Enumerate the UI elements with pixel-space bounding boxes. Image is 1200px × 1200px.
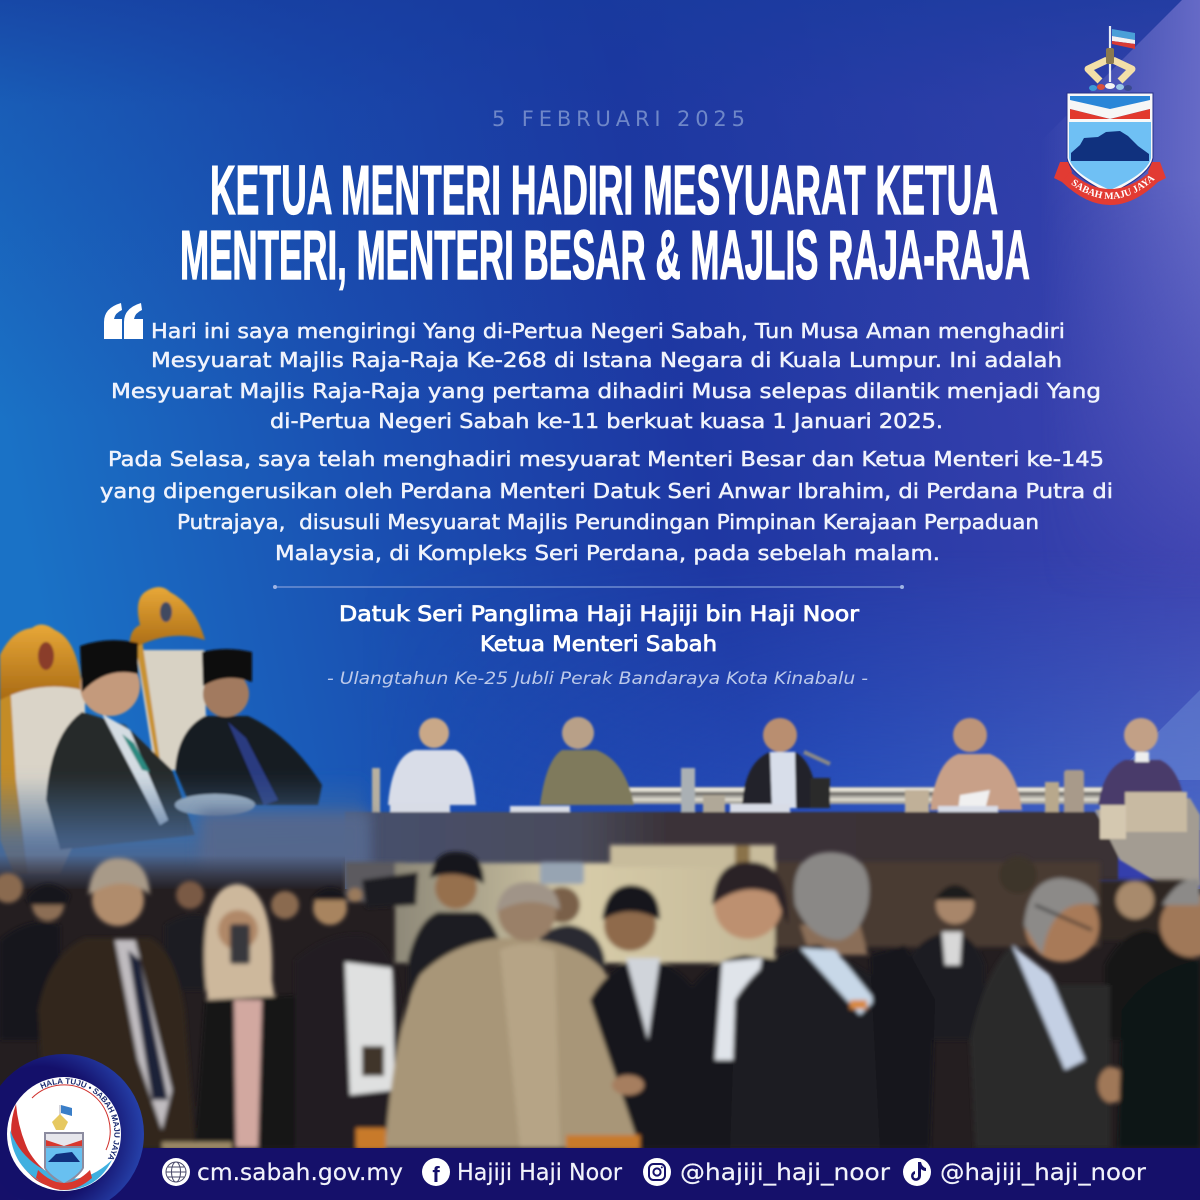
blue fade over lower seated figures xyxy=(0,775,370,890)
photo: head table meeting xyxy=(345,717,1200,890)
clear glass display at right xyxy=(1095,798,1200,890)
icon: instagram xyxy=(643,1158,671,1186)
right background people xyxy=(905,856,1200,1040)
crowd backdrop xyxy=(0,855,345,890)
facebook name: Hajiji Haji Noor xyxy=(457,1160,623,1186)
hijab woman xyxy=(195,884,310,1148)
rear man xyxy=(175,649,322,805)
tiktok handle: @hajiji_haji_noor xyxy=(940,1160,1147,1186)
quote paragraph 1: Mesyuarat Majlis Raja-Raja yang pertama dihadiri Musa selepas dilantik menjadi Yang xyxy=(111,379,1101,403)
quote paragraph 1: Hari ini saya mengiringi Yang di-Pertua Negeri Sabah, Tun Musa Aman menghadiri xyxy=(151,319,1065,343)
name plates xyxy=(390,803,998,818)
icon: facebook: f xyxy=(432,1162,440,1187)
photo: Yang di-Pertua and Chief Minister seated on throne chairs xyxy=(0,587,370,890)
quote paragraph 2: yang dipengerusikan oleh Perdana Menteri Datuk Seri Anwar Ibrahim, di Perdana Putra di xyxy=(100,479,1113,503)
title xyxy=(180,151,1030,294)
photo: crowd standing around table xyxy=(0,845,1200,1151)
phone and background man xyxy=(528,862,605,985)
icon: tiktok xyxy=(903,1158,931,1186)
bottles on table xyxy=(372,768,1084,818)
man with lanyard xyxy=(295,934,410,1148)
grey-haired man from back xyxy=(730,852,935,1148)
background xyxy=(0,0,1200,889)
front man xyxy=(46,640,195,850)
armrest xyxy=(175,794,255,816)
icon: Sabah coat of arms: SABAH MAJU JAYA xyxy=(1071,176,1155,200)
far-right man xyxy=(1118,879,1200,1148)
table front xyxy=(345,812,1118,880)
icon: facebook xyxy=(422,1158,450,1187)
attribution xyxy=(339,602,859,656)
Anwar Ibrahim xyxy=(660,862,790,1148)
footer bar xyxy=(0,1148,1200,1200)
background people heads xyxy=(0,873,350,1040)
quote paragraph 2: Putrajaya, disusuli Mesyuarat Majlis Perundingan Pimpinan Kerajaan Perpaduan xyxy=(177,510,1039,534)
logo: Hala Tuju Sabah Maju Jaya badge: HALA TUJU • SABAH MAJU JAYA xyxy=(40,1078,120,1160)
icon: Sabah coat of arms xyxy=(1054,26,1166,205)
right man with glasses xyxy=(970,878,1126,1148)
attribution: Ketua Menteri Sabah xyxy=(480,632,717,656)
front throne xyxy=(0,624,85,874)
orange chairs and mic xyxy=(162,1128,640,1150)
far-left man xyxy=(38,858,195,1148)
icon: globe xyxy=(162,1158,190,1186)
quote paragraph 1: Mesyuarat Majlis Raja-Raja Ke-268 di Istana Negara di Kuala Lumpur. Ini adalah xyxy=(151,348,1062,372)
quote paragraph 2 xyxy=(100,447,1113,565)
logo: Hala Tuju Sabah Maju Jaya badge xyxy=(0,1054,144,1200)
quote paragraph 2: Malaysia, di Kompleks Seri Perdana, pada sebelah malam. xyxy=(275,541,940,565)
quote paragraph 2: Pada Selasa, saya telah menghadiri mesyuarat Menteri Besar dan Ketua Menteri ke-145 xyxy=(108,447,1104,471)
beige suit man xyxy=(385,882,640,1148)
website: cm.sabah.gov.my xyxy=(197,1160,403,1186)
dark suit man xyxy=(590,885,720,1148)
date: 5 FEBRUARI 2025 xyxy=(492,107,745,131)
back wall stripes xyxy=(610,787,1125,804)
quote paragraph 1: di-Pertua Negeri Sabah ke-11 berkuat kuasa 1 Januari 2025. xyxy=(270,409,943,433)
cap man and camera xyxy=(348,852,505,1000)
attribution: Datuk Seri Panglima Haji Hajiji bin Haji Noor xyxy=(339,602,859,626)
icon: quotation mark xyxy=(104,303,143,339)
occasion caption: - Ulangtahun Ke-25 Jubli Perak Bandaraya Kota Kinabalu - xyxy=(327,669,868,689)
instagram handle: @hajiji_haji_noor xyxy=(680,1160,891,1186)
rear throne xyxy=(130,587,206,770)
quote paragraph 1 xyxy=(111,319,1101,433)
